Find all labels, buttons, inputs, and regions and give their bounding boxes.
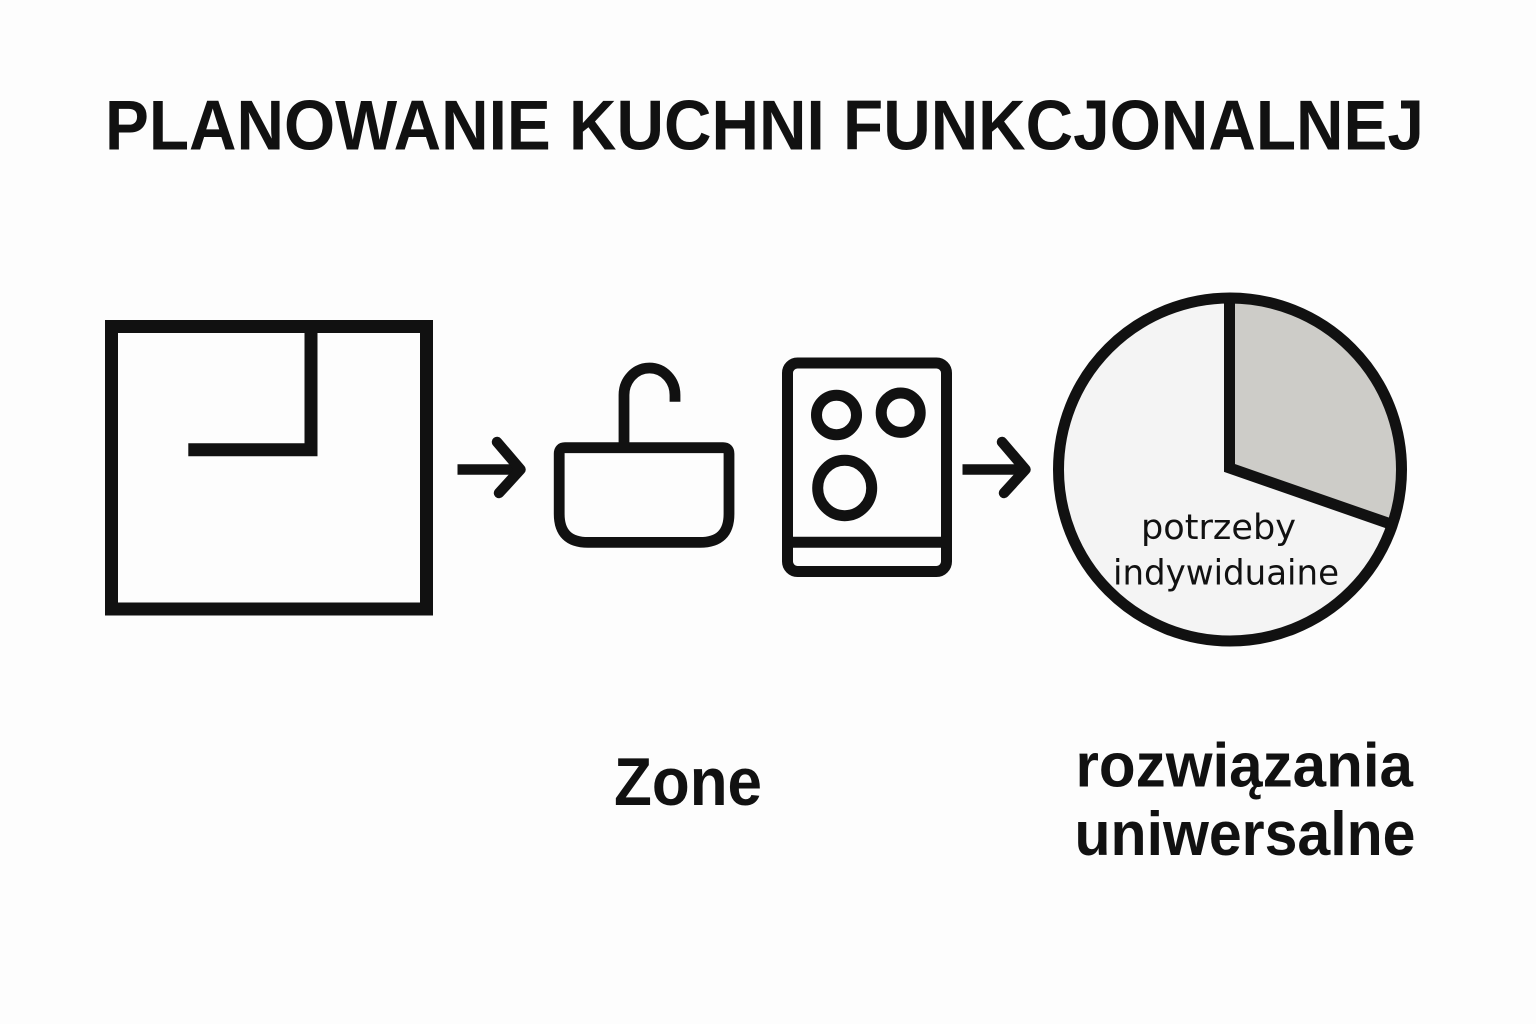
label: zone: Zone [614,744,762,820]
chart label: potrzeby [1141,508,1296,548]
label: universal solutions: uniwersalne [1074,800,1416,869]
arrow: plan to sink [458,442,520,493]
chart label: indywiduaine [1113,554,1339,594]
icon: cooktop [788,363,946,572]
icon: sink [559,368,729,542]
title: PLANOWANIE KUCHNI FUNKCJONALNEJ [105,85,1424,164]
arrow: cooktop to chart [962,442,1026,493]
label: universal solutions: rozwiązania [1076,732,1413,801]
pie chart [1058,297,1402,642]
icon: floor plan [112,326,426,609]
